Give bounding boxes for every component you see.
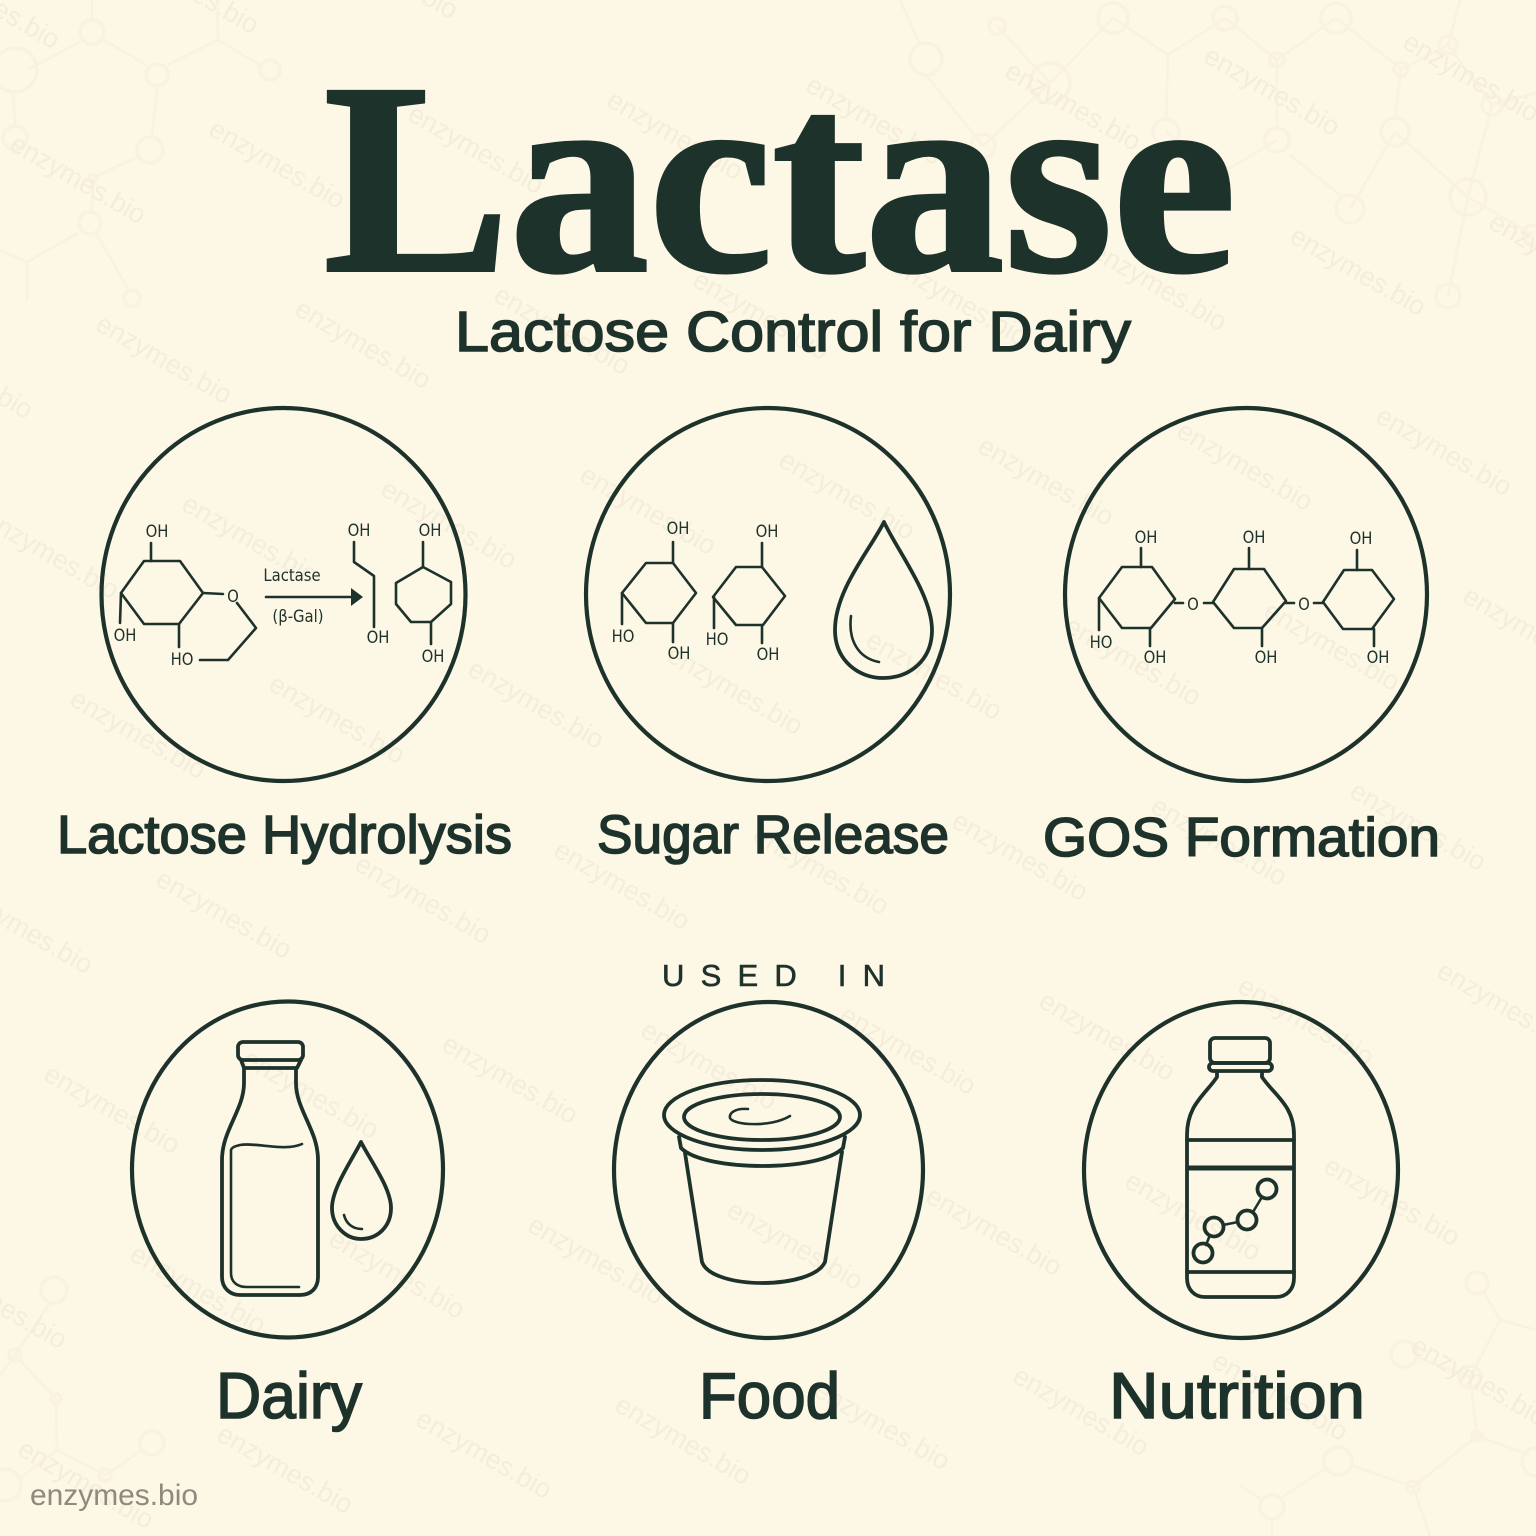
chemical diagram: oligosaccharide chain: OH bbox=[1243, 528, 1265, 547]
circle outline: GOS formation bbox=[1065, 408, 1427, 781]
icon: yogurt cup bbox=[664, 1080, 860, 1283]
panel: GOS formation bbox=[1043, 408, 1440, 868]
chemical diagram: lactase reaction: OH bbox=[367, 628, 389, 647]
text: enzymes.bio bbox=[151, 863, 297, 965]
chemical diagram: lactase reaction: OH bbox=[348, 521, 370, 540]
text: enzymes.bio bbox=[5, 128, 151, 230]
chemical diagram: lactase reaction: O bbox=[227, 587, 239, 606]
chemical diagram: oligosaccharide chain: O bbox=[1187, 595, 1199, 614]
chemical diagram: oligosaccharide chain: HO bbox=[1090, 633, 1112, 652]
text: enzymes.bio bbox=[1319, 1150, 1465, 1252]
text: enzymes.bio bbox=[1172, 415, 1318, 517]
text: enzymes.bio bbox=[947, 805, 1093, 907]
heading: used in: USED IN bbox=[662, 958, 885, 993]
text: enzymes.bio bbox=[1285, 220, 1431, 322]
chemical diagram: oligosaccharide chain: O bbox=[1298, 595, 1310, 614]
text: enzymes.bio bbox=[437, 1028, 583, 1130]
circle outline: nutrition bbox=[1084, 1002, 1398, 1338]
chemical diagram: lactase reaction: HO bbox=[171, 650, 193, 669]
text: enzymes.bio bbox=[290, 293, 436, 395]
text: enzymes.bio bbox=[636, 1014, 782, 1116]
text: enzymes.bio bbox=[973, 430, 1119, 532]
icon: supplement bottle bbox=[1187, 1038, 1294, 1297]
chemical diagram: oligosaccharide chain: OH bbox=[1144, 648, 1166, 667]
text: enzymes.bio bbox=[1086, 235, 1232, 337]
text: enzymes.bio bbox=[1233, 970, 1379, 1072]
panel: sugar release bbox=[586, 408, 950, 865]
text: enzymes.bio bbox=[662, 639, 808, 741]
label: lactose hydrolysis: Lactose Hydrolysis bbox=[57, 805, 512, 865]
text: enzymes.bio bbox=[523, 1209, 669, 1311]
text: enzymes.bio bbox=[1034, 985, 1180, 1087]
panel: lactose hydrolysis bbox=[57, 408, 512, 865]
circle outline: food bbox=[614, 1002, 923, 1338]
text: enzymes.bio bbox=[13, 1433, 159, 1535]
chemical diagram: lactase reaction: OH bbox=[422, 647, 444, 666]
text: enzymes.bio bbox=[774, 444, 920, 546]
text: enzymes.bio bbox=[610, 1389, 756, 1491]
chemical diagram: lactase reaction: OH bbox=[146, 522, 168, 541]
text: enzymes.bio bbox=[238, 1043, 384, 1145]
text: enzymes.bio bbox=[801, 69, 947, 171]
text: enzymes.bio bbox=[722, 1194, 868, 1296]
icon: water drop bbox=[835, 522, 932, 678]
text: enzymes.bio bbox=[1146, 790, 1292, 892]
text: enzymes.bio bbox=[1259, 595, 1405, 697]
text: enzymes.bio bbox=[1008, 1360, 1154, 1462]
footer brand: enzymes.bio bbox=[30, 1479, 198, 1512]
text: enzymes.bio bbox=[411, 1403, 557, 1505]
chemical diagram: lactase reaction: Lactase bbox=[263, 566, 321, 585]
circle outline: dairy bbox=[132, 1002, 443, 1338]
text: enzymes.bio bbox=[403, 98, 549, 200]
chemical diagram: oligosaccharide chain bbox=[1090, 528, 1394, 667]
text: enzymes.bio bbox=[1120, 1165, 1266, 1267]
chemical diagram: two sugar rings: HO bbox=[612, 627, 634, 646]
circle outline: sugar release bbox=[586, 408, 950, 781]
text: enzymes.bio bbox=[1207, 1345, 1353, 1447]
text: enzymes.bio bbox=[835, 999, 981, 1101]
text: enzymes.bio bbox=[125, 1238, 271, 1340]
chemical diagram: two sugar rings: HO bbox=[706, 630, 728, 649]
chemical diagram: two sugar rings bbox=[612, 519, 785, 664]
text: enzymes.bio bbox=[463, 653, 609, 755]
chemical diagram: lactase reaction bbox=[114, 521, 451, 669]
icon: milk bottle bbox=[222, 1042, 318, 1295]
chemical diagram: oligosaccharide chain: OH bbox=[1367, 648, 1389, 667]
text: enzymes.bio bbox=[921, 1180, 1067, 1282]
panel: dairy bbox=[132, 1002, 443, 1432]
text: enzymes.bio bbox=[91, 308, 237, 410]
text: enzymes.bio bbox=[489, 279, 635, 381]
text: enzymes.bio bbox=[212, 1418, 358, 1520]
text: enzymes.bio bbox=[264, 668, 410, 770]
label: GOS formation: GOS Formation bbox=[1043, 806, 1440, 868]
circle outline: lactose hydrolysis bbox=[102, 408, 466, 781]
text: enzymes.bio bbox=[549, 834, 695, 936]
label: nutrition: Nutrition bbox=[1109, 1359, 1365, 1432]
chemical diagram: two sugar rings: OH bbox=[757, 645, 779, 664]
text: enzymes.bio bbox=[350, 848, 496, 950]
chemical diagram: two sugar rings: OH bbox=[756, 522, 778, 541]
text: enzymes.bio bbox=[602, 84, 748, 186]
label: sugar release: Sugar Release bbox=[597, 805, 949, 865]
chemical diagram: two sugar rings: OH bbox=[668, 644, 690, 663]
label: food: Food bbox=[699, 1359, 840, 1432]
text: enzymes.bio bbox=[1199, 40, 1345, 142]
text: enzymes.bio bbox=[204, 113, 350, 215]
text: enzymes.bio bbox=[177, 488, 323, 590]
text: enzymes.bio bbox=[1371, 400, 1517, 502]
text: enzymes.bio bbox=[65, 683, 211, 785]
text: enzymes.bio bbox=[324, 1223, 470, 1325]
icon: small milk drop bbox=[332, 1142, 391, 1239]
label: dairy: Dairy bbox=[216, 1359, 362, 1432]
title: Lactase bbox=[324, 28, 1236, 329]
text: enzymes.bio bbox=[376, 473, 522, 575]
text: enzymes.bio bbox=[688, 264, 834, 366]
text: enzymes.bio bbox=[575, 459, 721, 561]
chemical diagram: oligosaccharide chain: OH bbox=[1350, 529, 1372, 548]
text: enzymes.bio bbox=[1060, 610, 1206, 712]
subtitle: Lactose Control for Dairy bbox=[455, 300, 1132, 364]
text: enzymes.bio bbox=[887, 250, 1033, 352]
text: enzymes.bio bbox=[809, 1374, 955, 1476]
chemical diagram: lactase reaction: (β-Gal) bbox=[272, 607, 324, 626]
text: enzymes.bio bbox=[1345, 775, 1491, 877]
text: enzymes.bio bbox=[748, 819, 894, 921]
chemical diagram: lactase reaction: OH bbox=[419, 521, 441, 540]
chemical diagram: lactase reaction: OH bbox=[114, 626, 136, 645]
text: enzymes.bio bbox=[1000, 55, 1146, 157]
text: enzymes.bio bbox=[39, 1058, 185, 1160]
panel: nutrition bbox=[1084, 1002, 1398, 1432]
text: enzymes.bio bbox=[861, 624, 1007, 726]
chemical diagram: oligosaccharide chain: OH bbox=[1135, 528, 1157, 547]
chemical diagram: two sugar rings: OH bbox=[667, 519, 689, 538]
panel: food bbox=[614, 1002, 923, 1432]
chemical diagram: oligosaccharide chain: OH bbox=[1255, 648, 1277, 667]
